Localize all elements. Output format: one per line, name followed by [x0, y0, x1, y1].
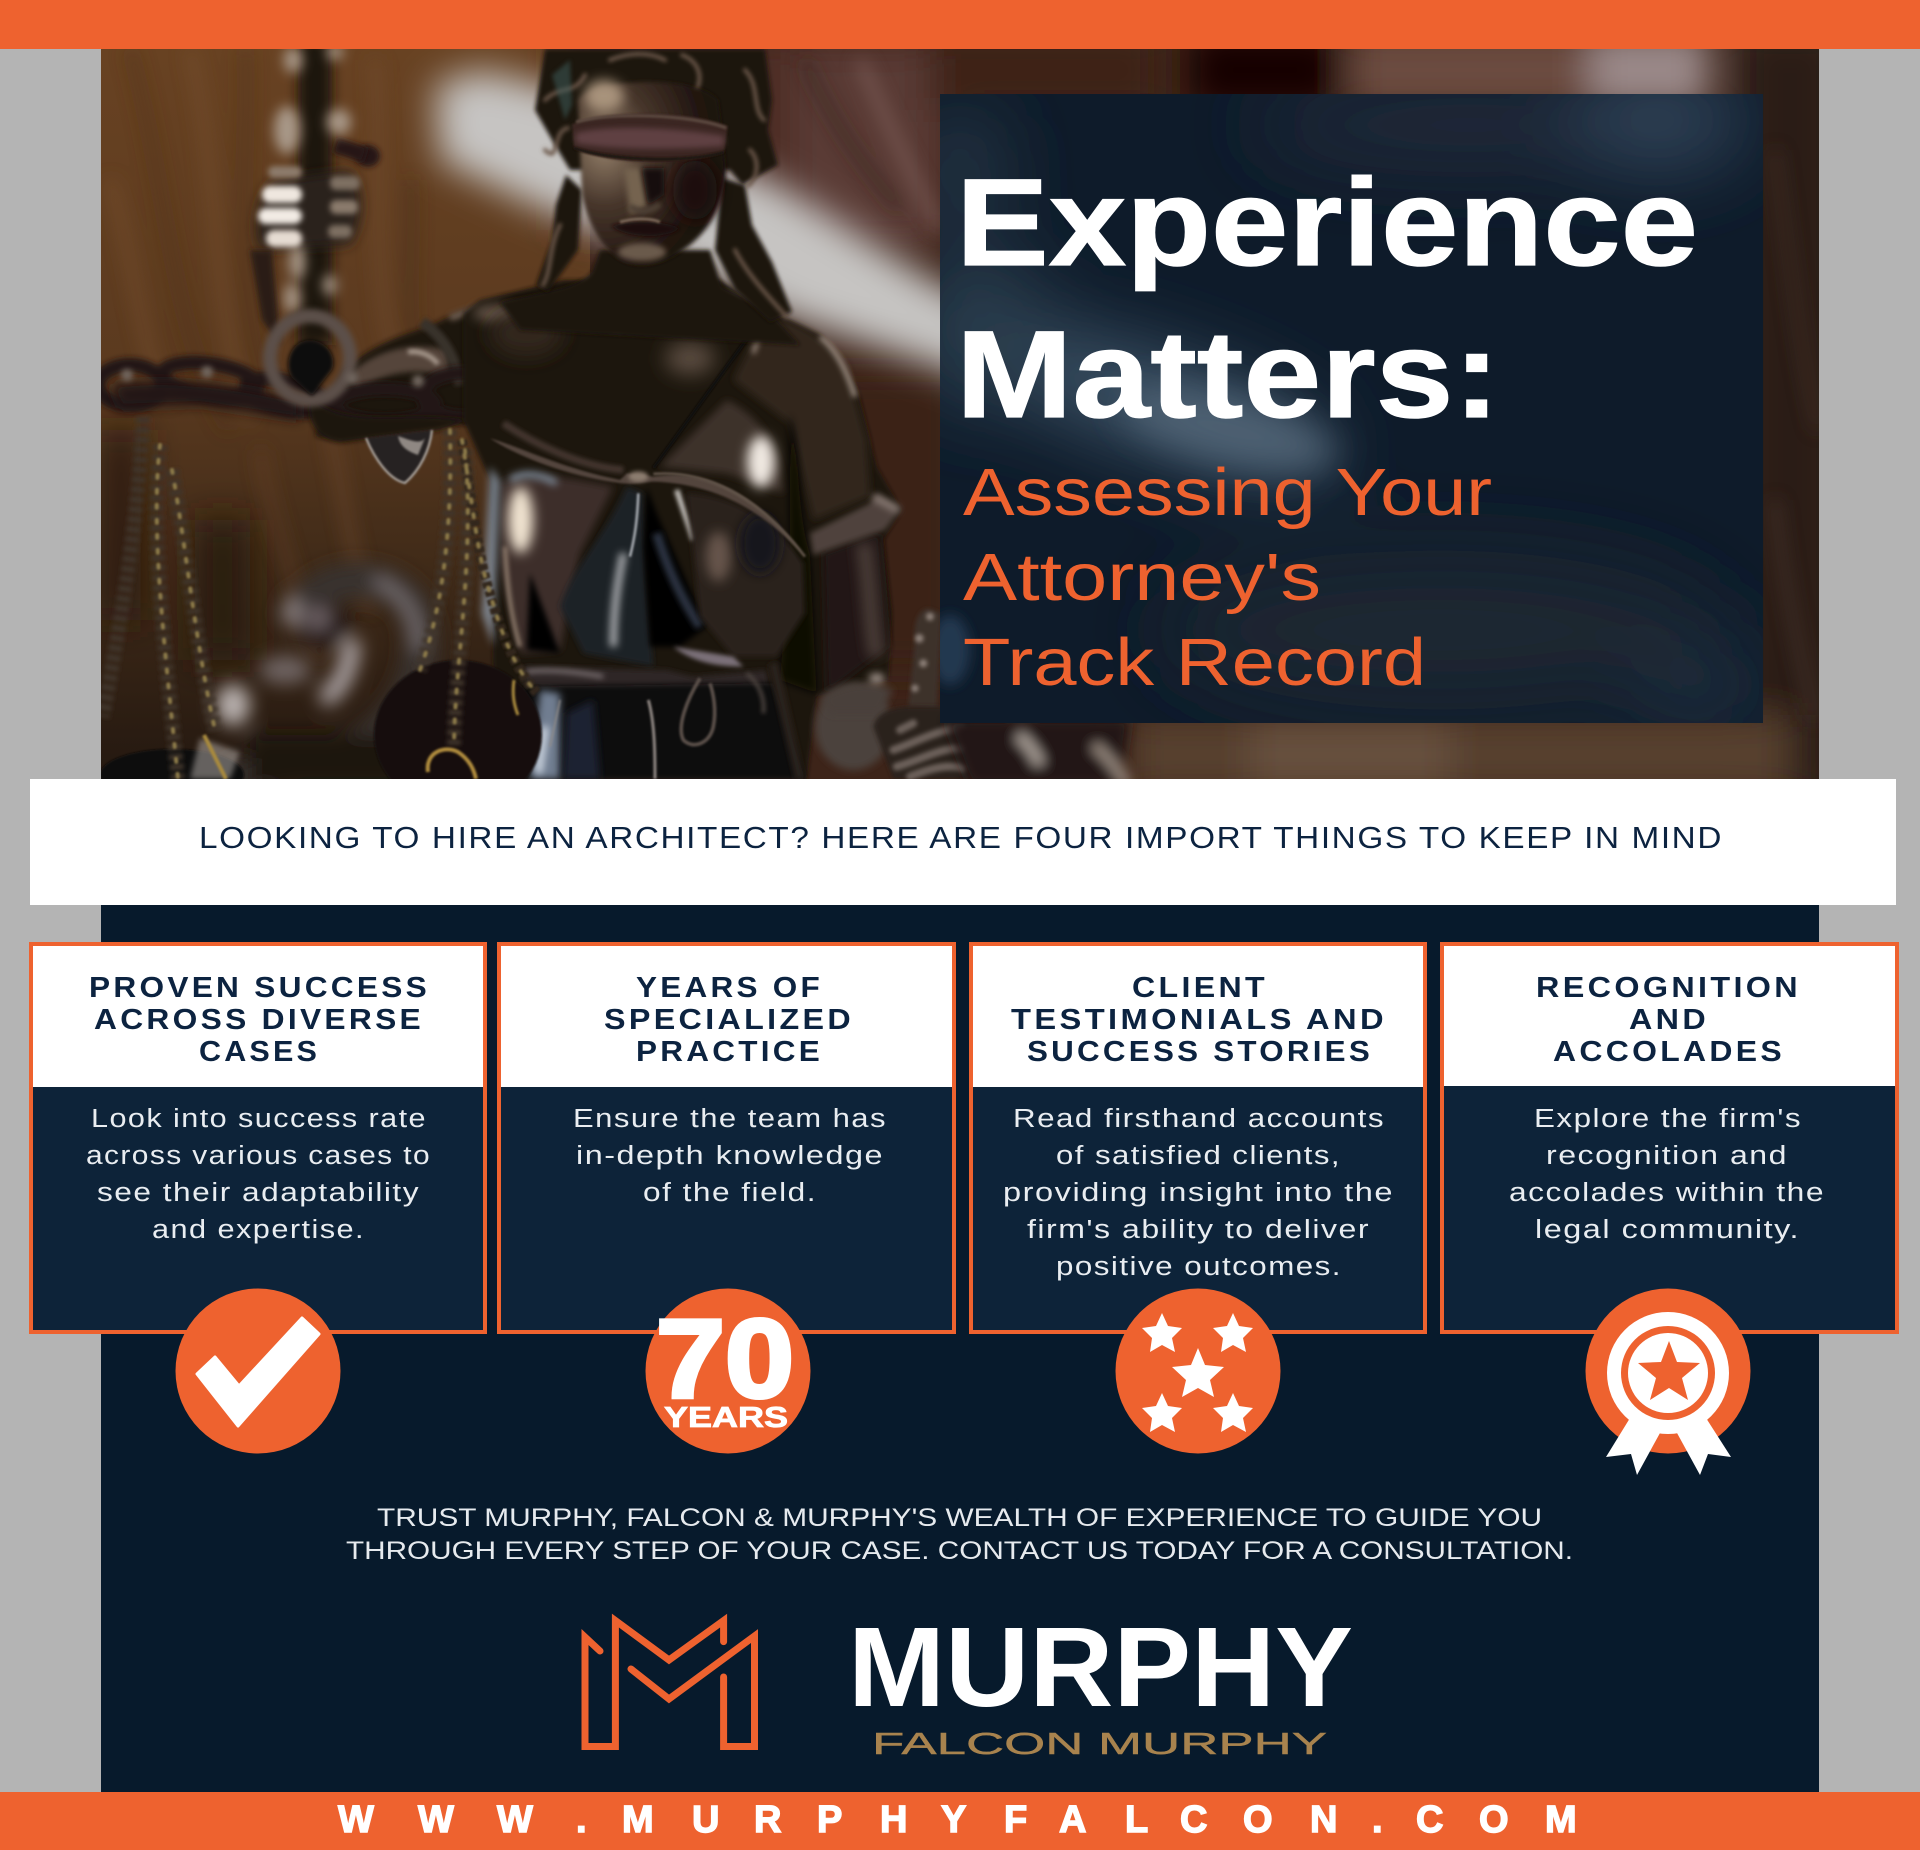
card 1 body: and expertise. [152, 1216, 365, 1244]
balance post and hand [250, 40, 380, 345]
card 1 heading: ACROSS DIVERSE [94, 1004, 424, 1036]
card 2 heading: SPECIALIZED [604, 1004, 854, 1036]
card 4 body: Explore the firm's [1534, 1105, 1802, 1133]
card 4 body: accolades within the [1509, 1179, 1825, 1207]
subtitle: Attorney's [963, 540, 1321, 615]
wooden backdrop [90, 30, 1840, 800]
icon: 70 years: 70 [656, 1297, 794, 1421]
card 1 heading [89, 972, 430, 1068]
sub wordmark: FALCON MURPHY [872, 1726, 1327, 1761]
card 2 heading: YEARS OF [636, 972, 823, 1004]
intro banner: LOOKING TO HIRE AN ARCHITECT? HERE ARE FOUR IMPORT THINGS TO KEEP IN MIND [199, 820, 1723, 855]
card 2 heading [604, 972, 854, 1068]
main title: Matters: [956, 306, 1500, 444]
blurred grey band [435, 70, 1000, 390]
card 4 heading [1536, 972, 1801, 1068]
hero photograph: statue of Lady Justice [90, 30, 1840, 810]
card 4 body [1509, 1105, 1825, 1244]
card 4 heading: RECOGNITION [1536, 972, 1801, 1004]
title panel [910, 70, 1770, 740]
card 3 body: of satisfied clients, [1056, 1142, 1341, 1170]
card 3 heading: CLIENT [1132, 972, 1268, 1004]
main title [956, 154, 1698, 444]
card 3 heading: SUCCESS STORIES [1027, 1036, 1373, 1068]
card 2: years of practice [497, 942, 956, 1334]
palm [815, 683, 892, 770]
lower arm [826, 538, 879, 686]
sword hand [908, 608, 942, 710]
skirt [500, 683, 805, 779]
bottom orange bar with website: WWW.MURPHYFALCON.COM [338, 1799, 1577, 1841]
card 4 body: legal community. [1535, 1216, 1800, 1244]
card 4 heading: ACCOLADES [1553, 1036, 1785, 1068]
body silhouette [463, 280, 902, 779]
icon: 70 years [646, 1288, 810, 1454]
right shoulder [733, 313, 870, 520]
subtitle: Assessing Your [963, 455, 1492, 530]
sash [490, 438, 805, 557]
closing call to action: THROUGH EVERY STEP OF YOUR CASE. CONTACT US TODAY FOR A CONSULTATION. [346, 1537, 1573, 1565]
card 1 body [86, 1105, 431, 1244]
card 3 heading [1011, 972, 1387, 1068]
icon: 70 years: YEARS [664, 1402, 788, 1434]
icon: check mark [176, 1288, 340, 1454]
card 1 body: Look into success rate [91, 1105, 427, 1133]
card 4 body: recognition and [1546, 1142, 1788, 1170]
icon: five stars [1116, 1288, 1280, 1454]
card 1 heading: PROVEN SUCCESS [89, 972, 430, 1004]
card 4: recognition [1440, 942, 1899, 1334]
card 3 heading: TESTIMONIALS AND [1011, 1004, 1387, 1036]
statue torso (drawn at 3x scale) [463, 280, 970, 779]
card 1 body: across various cases to [86, 1142, 431, 1170]
card 1 heading: CASES [199, 1036, 320, 1068]
neck and chest light [587, 280, 620, 330]
card 2 body: of the field. [643, 1179, 817, 1207]
belt [522, 666, 769, 687]
icon: M monogram [585, 1621, 754, 1746]
card 3: testimonials [969, 942, 1427, 1334]
scale chains and pans [100, 417, 542, 810]
card 1: proven success [29, 942, 487, 1334]
arm shadow [780, 413, 817, 693]
card 2 body: Ensure the team has [573, 1105, 887, 1133]
blindfold [572, 114, 728, 162]
dress left panel [500, 476, 613, 653]
card 2 body: in-depth knowledge [576, 1142, 884, 1170]
card 2 body [573, 1105, 887, 1207]
card 3 body [1003, 1105, 1394, 1281]
closing call to action [346, 1504, 1573, 1565]
intro banner [30, 779, 1896, 905]
bottom orange bar with website [0, 1792, 1920, 1850]
closing call to action: TRUST MURPHY, FALCON & MURPHY'S WEALTH OF EXPERIENCE TO GUIDE YOU [377, 1504, 1542, 1532]
wordmark: MURPHY [848, 1604, 1353, 1730]
chain beam links [98, 357, 507, 421]
bracelet [810, 493, 902, 555]
card 4 heading: AND [1629, 1004, 1709, 1036]
subtitle [963, 455, 1492, 700]
card 2 heading: PRACTICE [636, 1036, 823, 1068]
subtitle: Track Record [963, 625, 1426, 700]
neckline [652, 342, 746, 469]
main title: Experience [956, 154, 1698, 292]
statue head [572, 80, 728, 265]
logo [585, 1604, 1353, 1761]
breast [660, 400, 783, 493]
drape tip [366, 430, 432, 483]
top orange bar [0, 0, 1920, 49]
card 3 body: positive outcomes. [1056, 1253, 1342, 1281]
card 3 body: firm's ability to deliver [1027, 1216, 1370, 1244]
card 3 body: providing insight into the [1003, 1179, 1394, 1207]
swirl ornament [205, 559, 442, 779]
card 3 body: Read firsthand accounts [1013, 1105, 1385, 1133]
statue hair [500, 49, 800, 345]
dress center folds [527, 573, 560, 653]
navy lower section [101, 905, 1819, 1792]
dress right panel [687, 493, 805, 657]
card 1 body: see their adaptability [97, 1179, 420, 1207]
arm, ring and balance beam [101, 306, 470, 446]
foreground blurred strokes below panel [945, 720, 1130, 785]
icon: award rosette [1586, 1288, 1750, 1475]
